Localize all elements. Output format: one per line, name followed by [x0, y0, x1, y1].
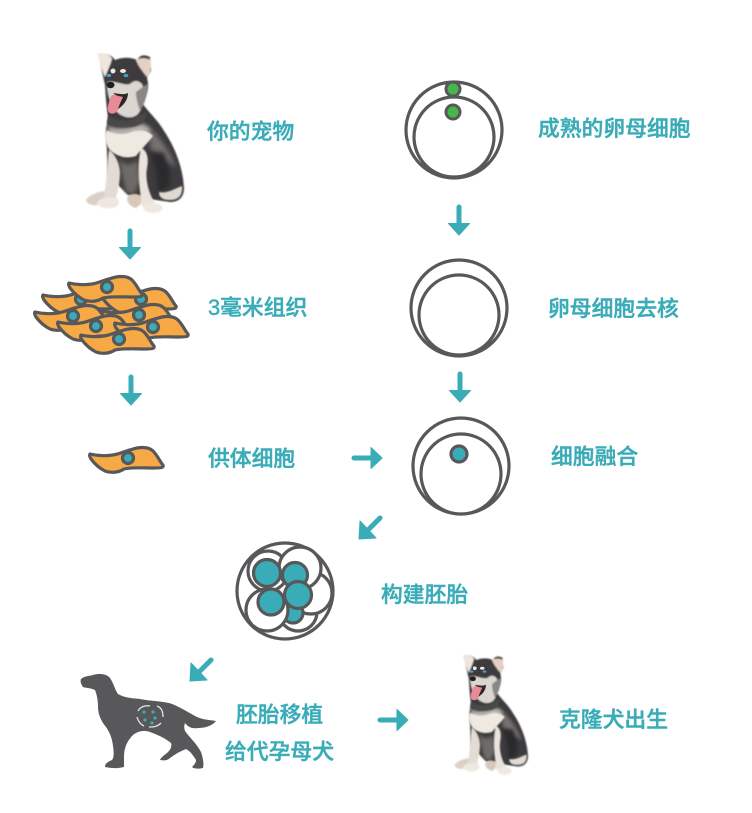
label: build embryo: 构建胚胎 [381, 582, 468, 607]
icon: surrogate dog silhouette [81, 674, 216, 769]
label: enucleated oocyte: 卵母细胞去核 [548, 296, 679, 321]
icon: cell fusion [413, 418, 509, 514]
arrow: embryo to transfer [190, 660, 211, 681]
arrow: pet to tissue [120, 231, 140, 259]
puppy photo: cloned dog born [454, 655, 528, 775]
label: mature oocyte: 成熟的卵母细胞 [538, 116, 691, 141]
label: cell fusion: 细胞融合 [551, 444, 638, 469]
label: embryo transfer to surrogate [225, 702, 334, 764]
label: your pet: 你的宠物 [207, 119, 294, 144]
label: 3 mm tissue: 3毫米组织 [208, 295, 307, 320]
icon: mature oocyte [406, 82, 502, 178]
icon: enucleated oocyte [411, 260, 507, 356]
arrow: enucleation to fusion [450, 374, 470, 402]
icon: donor cell [90, 448, 163, 472]
arrow: transfer to birth [380, 710, 408, 730]
arrow: tissue to donor cell [120, 377, 142, 405]
arrow: donor cell to fusion [354, 448, 382, 468]
icon: embryo [237, 543, 333, 639]
label: embryo transfer to surrogate: 胚胎移植 [236, 702, 323, 727]
puppy photo: your pet [86, 53, 184, 213]
arrow: oocyte to enucleation [448, 207, 470, 235]
icon: tissue cells [35, 276, 188, 353]
arrow: fusion to embryo [359, 518, 380, 539]
label: embryo transfer to surrogate: 给代孕母犬 [225, 739, 334, 764]
label: cloned dog born: 克隆犬出生 [559, 707, 668, 732]
label: donor cell: 供体细胞 [208, 446, 295, 471]
